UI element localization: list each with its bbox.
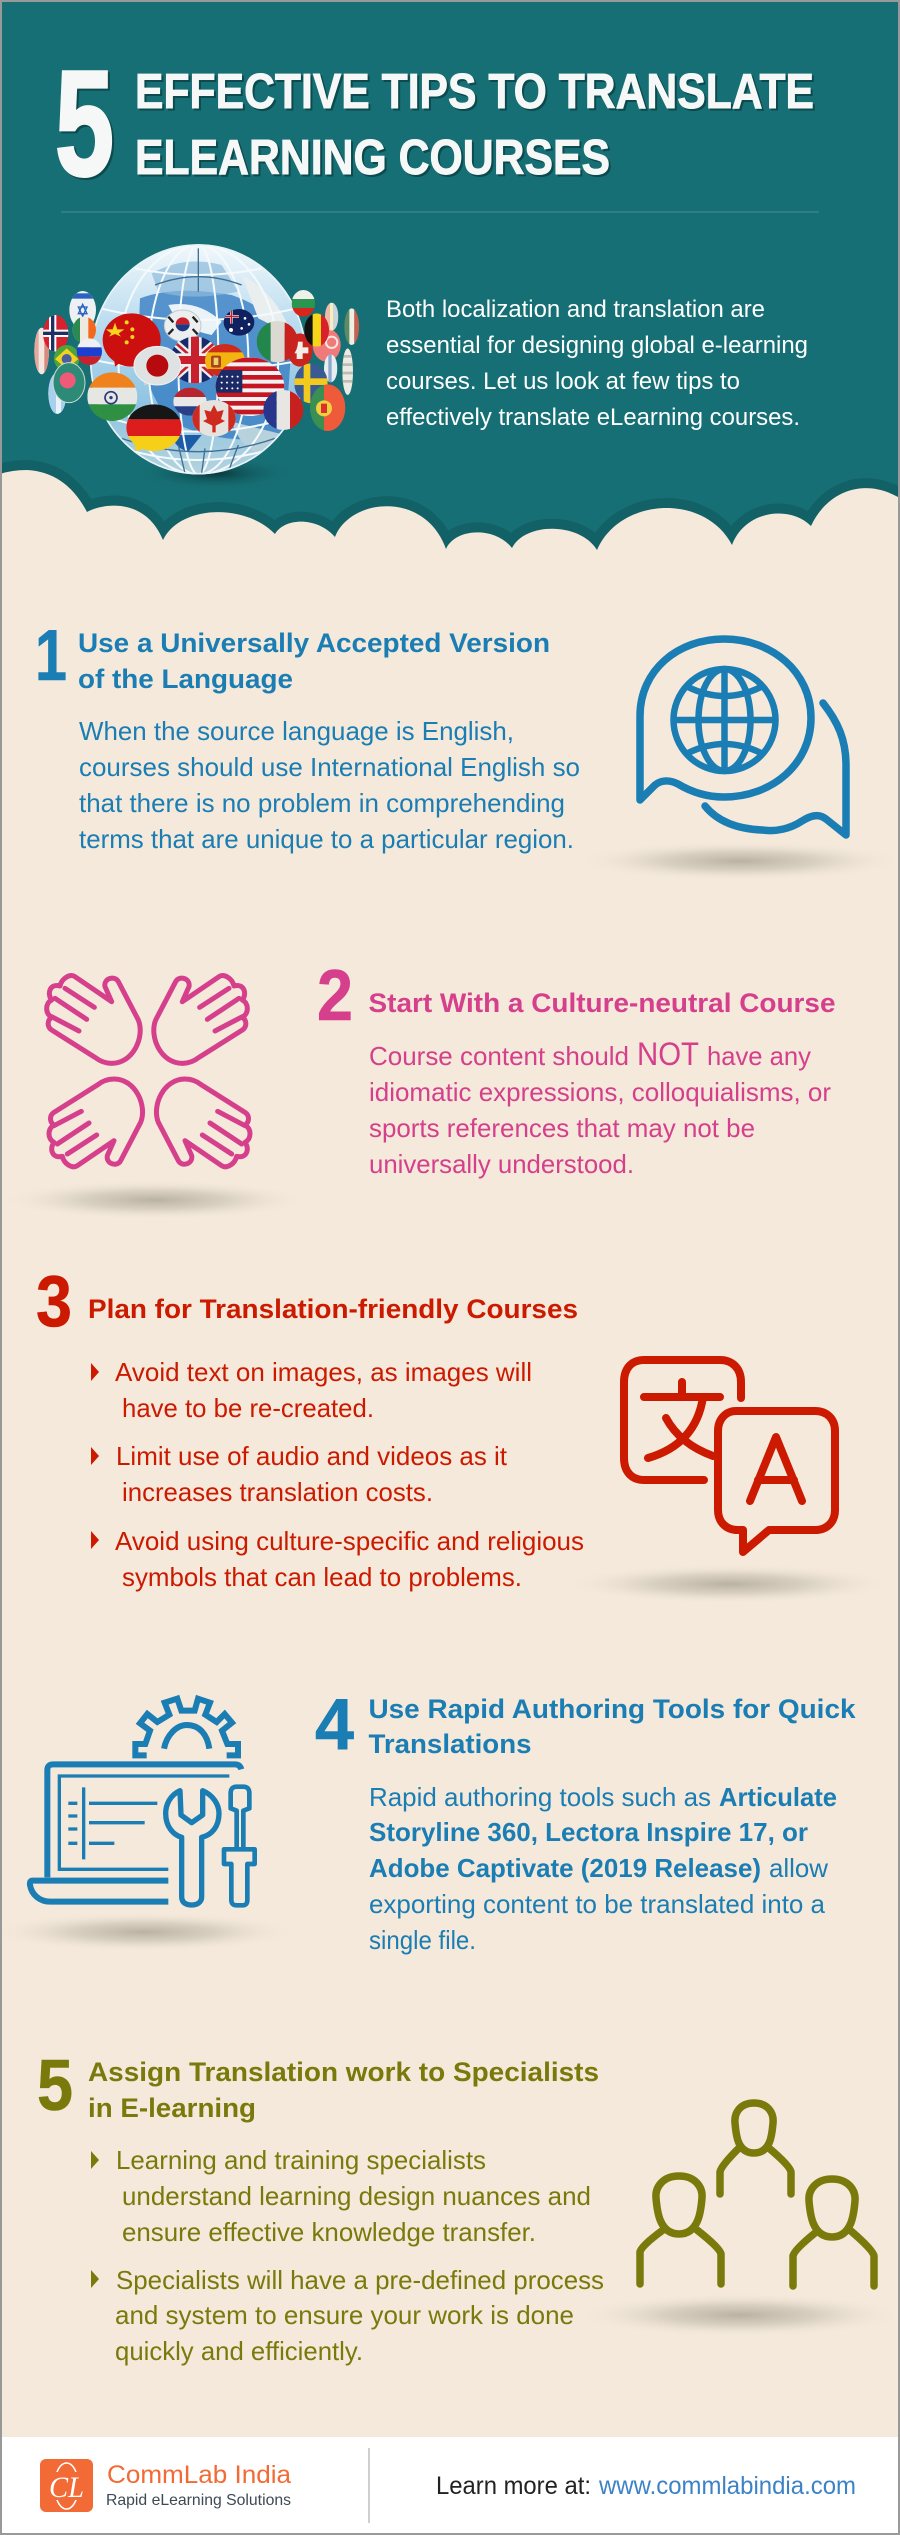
body 4: Articulate (719, 1782, 837, 1812)
flag: pale tricolour (325, 303, 338, 331)
body 1: courses should use International English so (79, 752, 580, 782)
person: left (640, 2176, 721, 2284)
icon shadow 2 (0, 1180, 310, 1220)
bullet list 5: ensure effective knowledge transfer. (122, 2217, 536, 2247)
flag: Italy (257, 321, 299, 362)
gear (135, 1699, 238, 1755)
number 1: 1 (35, 616, 67, 696)
footer link: www.commlabindia.com (598, 2472, 856, 2500)
body 2 (369, 1036, 831, 1179)
panel: teal header (0, 0, 900, 560)
flag: Finland (324, 354, 337, 382)
flag: Netherlands (173, 388, 207, 416)
flag: United Kingdom (172, 336, 216, 384)
code lines (68, 1787, 157, 1859)
icon: laptop with gear and tools (30, 1699, 255, 1905)
bullet list 3: have to be re-created. (122, 1393, 374, 1423)
body 4: Storyline 360, Lectora Inspire 17, or (369, 1817, 808, 1847)
logo text: Rapid eLearning Solutions (106, 2492, 291, 2509)
icon: globe in speech bubbles (640, 639, 846, 835)
flag: Switzerland (287, 333, 313, 367)
heading 2: Start With a Culture-neutral Course (368, 988, 836, 1018)
heading 4: Use Rapid Authoring Tools for Quick (368, 1694, 857, 1724)
heading 1: Use a Universally Accepted Version (78, 628, 550, 658)
bullet list 3: Avoid using culture-specific and religious (115, 1526, 584, 1556)
flag: Germany (126, 404, 182, 451)
body 4: exporting content to be translated into a (369, 1889, 826, 1919)
person: right (793, 2179, 874, 2286)
bullet list 3: increases translation costs. (122, 1477, 433, 1507)
flag: Mexico (344, 308, 359, 345)
intro text: Both localization and translation are (386, 296, 765, 323)
flag: Norway (42, 315, 70, 352)
hand: top left (47, 976, 140, 1063)
flag: France (263, 390, 303, 430)
icon shadow 1 (575, 841, 900, 881)
logo mark (40, 2459, 93, 2512)
hand: top right (154, 976, 247, 1063)
icon: translation bubbles (624, 1360, 835, 1552)
bullet list 5: quickly and efficiently. (115, 2336, 363, 2366)
body 4 (369, 1782, 837, 1955)
flag: Peru (34, 328, 49, 374)
body 2: have any (707, 1041, 811, 1071)
laptop (30, 1764, 241, 1902)
intro text: courses. Let us look at few tips to (386, 368, 740, 395)
number 4: 4 (315, 1685, 354, 1765)
intro text: essential for designing global e-learning (386, 332, 808, 359)
bullet list 3: Avoid text on images, as images will (115, 1357, 532, 1387)
heading 1: of the Language (78, 664, 293, 694)
bullet list 3 (91, 1357, 584, 1592)
flag: Argentina (48, 374, 66, 414)
bullet list 5: understand learning design nuances and (122, 2181, 591, 2211)
hand: bottom left (49, 1079, 143, 1167)
flag: Spain (205, 344, 245, 376)
intro text (386, 296, 808, 431)
globe sphere (90, 244, 307, 474)
icon shadow 4 (0, 1912, 299, 1952)
icon shadow 5 (575, 2293, 900, 2337)
heading 5 (88, 2057, 599, 2123)
flag: Bulgaria (292, 290, 315, 317)
flag: Canada (192, 400, 236, 437)
flag: Turkey (313, 328, 341, 362)
flag: South Korea (164, 310, 201, 341)
body 2: sports references that may not be (369, 1113, 755, 1143)
body 4: allow (769, 1853, 828, 1883)
title number: 5 (55, 39, 114, 207)
flag: Russia (77, 338, 103, 365)
panel: footer (0, 2437, 900, 2535)
heading 1 (78, 628, 550, 694)
icon: four hands (47, 976, 250, 1167)
heading 3: Plan for Translation-friendly Courses (88, 1294, 578, 1324)
bullet list 5 (91, 2145, 604, 2366)
body 4: Rapid authoring tools such as (369, 1782, 711, 1812)
body 2: idiomatic expressions, colloquialisms, or (369, 1077, 831, 1107)
body 2: universally understood. (369, 1149, 634, 1179)
flag: Australia (223, 308, 255, 337)
bullet list 5: Learning and training specialists (116, 2145, 486, 2175)
panel: tip 1 (35, 616, 580, 854)
logo text: CommLab India (107, 2461, 291, 2489)
panel: tip 4 (315, 1685, 857, 1955)
flag: Greece (342, 348, 353, 395)
title: EFFECTIVE TIPS TO TRANSLATE (135, 65, 814, 119)
body 1: that there is no problem in comprehending (79, 788, 565, 818)
bullet list 3: symbols that can lead to problems. (122, 1562, 522, 1592)
body 1 (79, 716, 580, 854)
body 1: When the source language is English, (79, 716, 514, 746)
body 4: single file. (369, 1925, 476, 1955)
bullet list 5: Specialists will have a pre-defined process (116, 2265, 604, 2295)
flag: India (87, 372, 137, 422)
heading 5: in E-learning (88, 2093, 256, 2123)
flag: Japan (134, 346, 181, 386)
heading 4 (368, 1694, 857, 1759)
title (135, 65, 814, 185)
flag: Ireland (72, 317, 97, 343)
flag: USA (215, 357, 285, 417)
footer link (436, 2472, 856, 2500)
icon shadow 3 (564, 1564, 894, 1604)
person: top (720, 2103, 791, 2194)
body 1: terms that are unique to a particular region. (79, 824, 574, 854)
bullet list 3: Limit use of audio and videos as it (116, 1441, 508, 1471)
heading 5: Assign Translation work to Specialists (88, 2057, 599, 2087)
wrench (166, 1791, 219, 1905)
title: ELEARNING COURSES (135, 131, 610, 185)
icon: globe with speech-bubble flags (33, 244, 359, 490)
panel: tip 2 (317, 956, 836, 1179)
number 5: 5 (37, 2046, 73, 2126)
panel: tip 5 (37, 2046, 604, 2366)
body 2: NOT (637, 1036, 699, 1072)
hand: bottom right (156, 1079, 250, 1167)
icon: three people (640, 2103, 874, 2286)
logo text (106, 2461, 291, 2509)
flag: Belgium (304, 313, 329, 347)
flag: Sweden (294, 363, 328, 403)
logo mark: CL (49, 2471, 84, 2504)
footer link: Learn more at: (436, 2472, 591, 2500)
flag: Portugal (310, 384, 345, 431)
body 2: Course content should (369, 1041, 629, 1071)
panel: tip 3 (36, 1262, 584, 1592)
body 4: Adobe Captivate (2019 Release) (369, 1853, 761, 1883)
intro text: effectively translate eLearning courses. (386, 404, 800, 431)
flag: Israel (69, 291, 96, 324)
flag: Brazil (54, 345, 80, 368)
flag: Bangladesh (53, 363, 85, 403)
bullet list 5: and system to ensure your work is done (115, 2300, 574, 2330)
heading 4: Translations (368, 1729, 532, 1759)
screwdriver (224, 1787, 255, 1905)
number 2: 2 (317, 956, 353, 1036)
flag: China (103, 313, 161, 367)
number 3: 3 (36, 1262, 72, 1342)
